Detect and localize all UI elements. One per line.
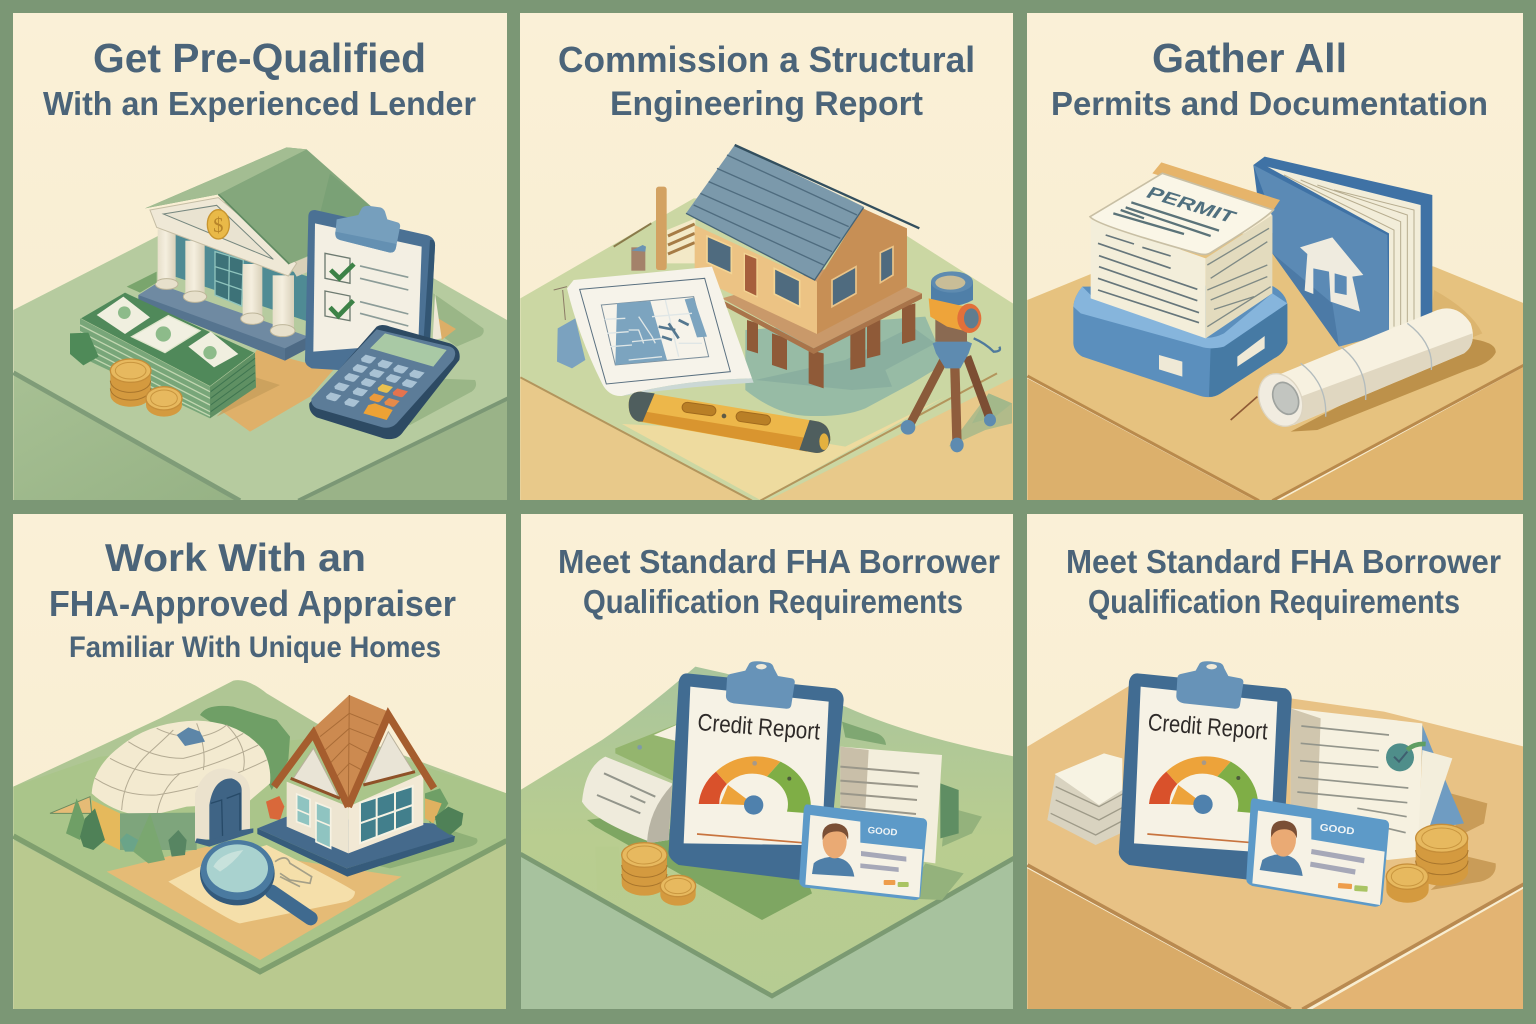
panel: gather permits and documentation (1027, 13, 1524, 502)
heading: get pre-qualified: With an Experienced Lender (43, 85, 476, 122)
heading: borrower requirements, tan: Qualification Requirements (1088, 583, 1460, 620)
illustration: credit report, ID card and coins on tan (1027, 661, 1524, 1010)
dome home (50, 721, 270, 850)
credit score gauge (699, 756, 811, 815)
cash stack (70, 272, 256, 418)
coins (110, 359, 182, 417)
coins (1386, 824, 1468, 903)
permit paper stack (1090, 162, 1280, 338)
back documents and stacks (582, 722, 959, 863)
bank building (138, 147, 373, 361)
clipboard: credit report: Credit Report (697, 709, 821, 746)
dollar coin: $ (213, 215, 223, 237)
back documents (1291, 708, 1464, 860)
heading: FHA-approved appraiser: Familiar With Unique Homes (69, 631, 441, 664)
spirit level (629, 392, 830, 453)
heading: borrower requirements, green: Meet Standard FHA Borrower (558, 543, 1000, 580)
bushes behind dome (200, 706, 290, 790)
heading: borrower requirements, green (558, 543, 1000, 620)
permit paper stack: PERMIT (1142, 183, 1240, 226)
illustration: dome home, house and magnifier (13, 680, 507, 1010)
fence and scrap materials (554, 187, 695, 368)
heading: get pre-qualified (43, 35, 476, 122)
small trees (66, 796, 284, 863)
blueprint sheet (567, 267, 754, 396)
magnifying glass (200, 840, 311, 918)
ID card (1246, 798, 1389, 907)
clipboard: credit report: Credit Report (1147, 709, 1269, 745)
panel: FHA-approved appraiser (13, 514, 507, 1010)
calculator (309, 325, 460, 439)
illustration: bank, cash, clipboard and calculator (13, 147, 510, 502)
heading: get pre-qualified: Get Pre-Qualified (93, 35, 426, 81)
dollar coin (207, 210, 229, 239)
loose paper stack (1047, 753, 1124, 845)
heading: borrower requirements, green: Qualification Requirements (583, 583, 963, 620)
rolled plans (1231, 308, 1473, 434)
illustration: house on stilts, blueprint, level and tripod (520, 145, 1015, 502)
illustration: credit report, ID card and coins on green (520, 661, 1015, 1010)
heading: gather permits: Permits and Documentation (1051, 85, 1488, 122)
traditional house (257, 695, 463, 877)
heading: structural engineering report: Engineering Report (610, 85, 923, 123)
panel: borrower qualification, tan (1027, 514, 1524, 1010)
heading: FHA-approved appraiser (49, 537, 456, 664)
illustration: permit stack, binder and rolled plans (1027, 157, 1524, 502)
heading: borrower requirements, tan (1066, 543, 1501, 620)
ID card (799, 804, 927, 900)
heading: borrower requirements, tan: Meet Standard FHA Borrower (1066, 543, 1501, 580)
heading: structural engineering report (558, 39, 975, 123)
ID card: GOOD (867, 825, 898, 838)
ID card: GOOD (1319, 822, 1355, 838)
house icon (1300, 237, 1363, 312)
heading: FHA-approved appraiser: Work With an (105, 537, 366, 580)
panel: structural engineering report (520, 13, 1015, 502)
clipboard: credit report (668, 661, 844, 880)
stilt house (686, 145, 922, 388)
surveyor tripod (901, 271, 1012, 452)
blue document box (1073, 285, 1287, 397)
panel: borrower qualification, green (520, 514, 1015, 1010)
heading: FHA-approved appraiser: FHA-Approved Appraiser (49, 583, 456, 624)
heading: gather permits (1053, 42, 1486, 116)
panel: get pre-qualified (13, 13, 510, 502)
credit score gauge (1149, 756, 1258, 814)
heading: gather permits: Gather All (1152, 35, 1347, 81)
coins (622, 843, 696, 906)
clipboard: credit report (1119, 661, 1292, 880)
heading: structural engineering report: Commission a Structural (558, 39, 975, 80)
blue binder with house icon (1253, 157, 1432, 347)
clipboard with checklist (305, 206, 442, 373)
